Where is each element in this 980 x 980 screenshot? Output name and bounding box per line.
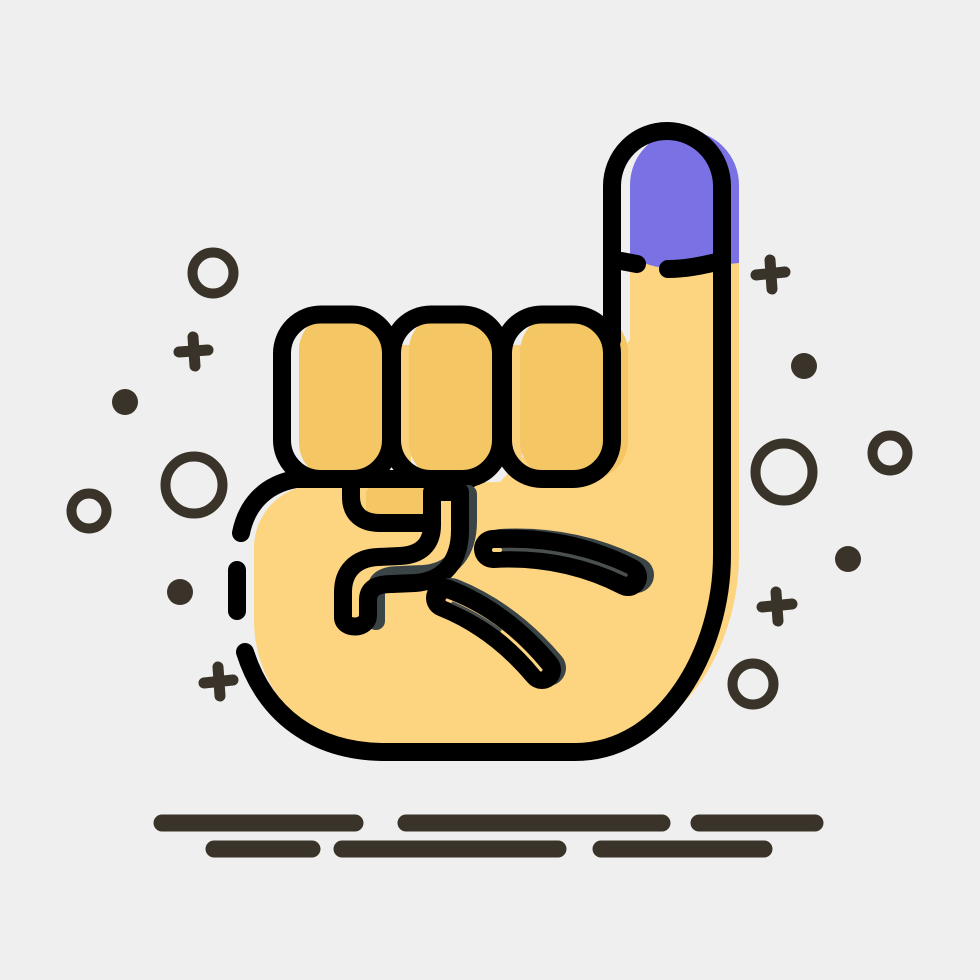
icon: hand outline: [237, 131, 722, 752]
ground lines: [162, 823, 815, 849]
decorative rings: [72, 252, 908, 704]
icon: folded fingers outline: [282, 314, 612, 479]
icon: palm creases: [445, 547, 636, 670]
icon: thumb: [343, 484, 468, 627]
icon: hand fill: [254, 130, 739, 752]
icon: folded fingers fill: [299, 314, 628, 516]
decorative plus signs: [179, 260, 792, 696]
decorative dots: [112, 353, 861, 605]
icon: purple fingertip: [630, 130, 739, 267]
